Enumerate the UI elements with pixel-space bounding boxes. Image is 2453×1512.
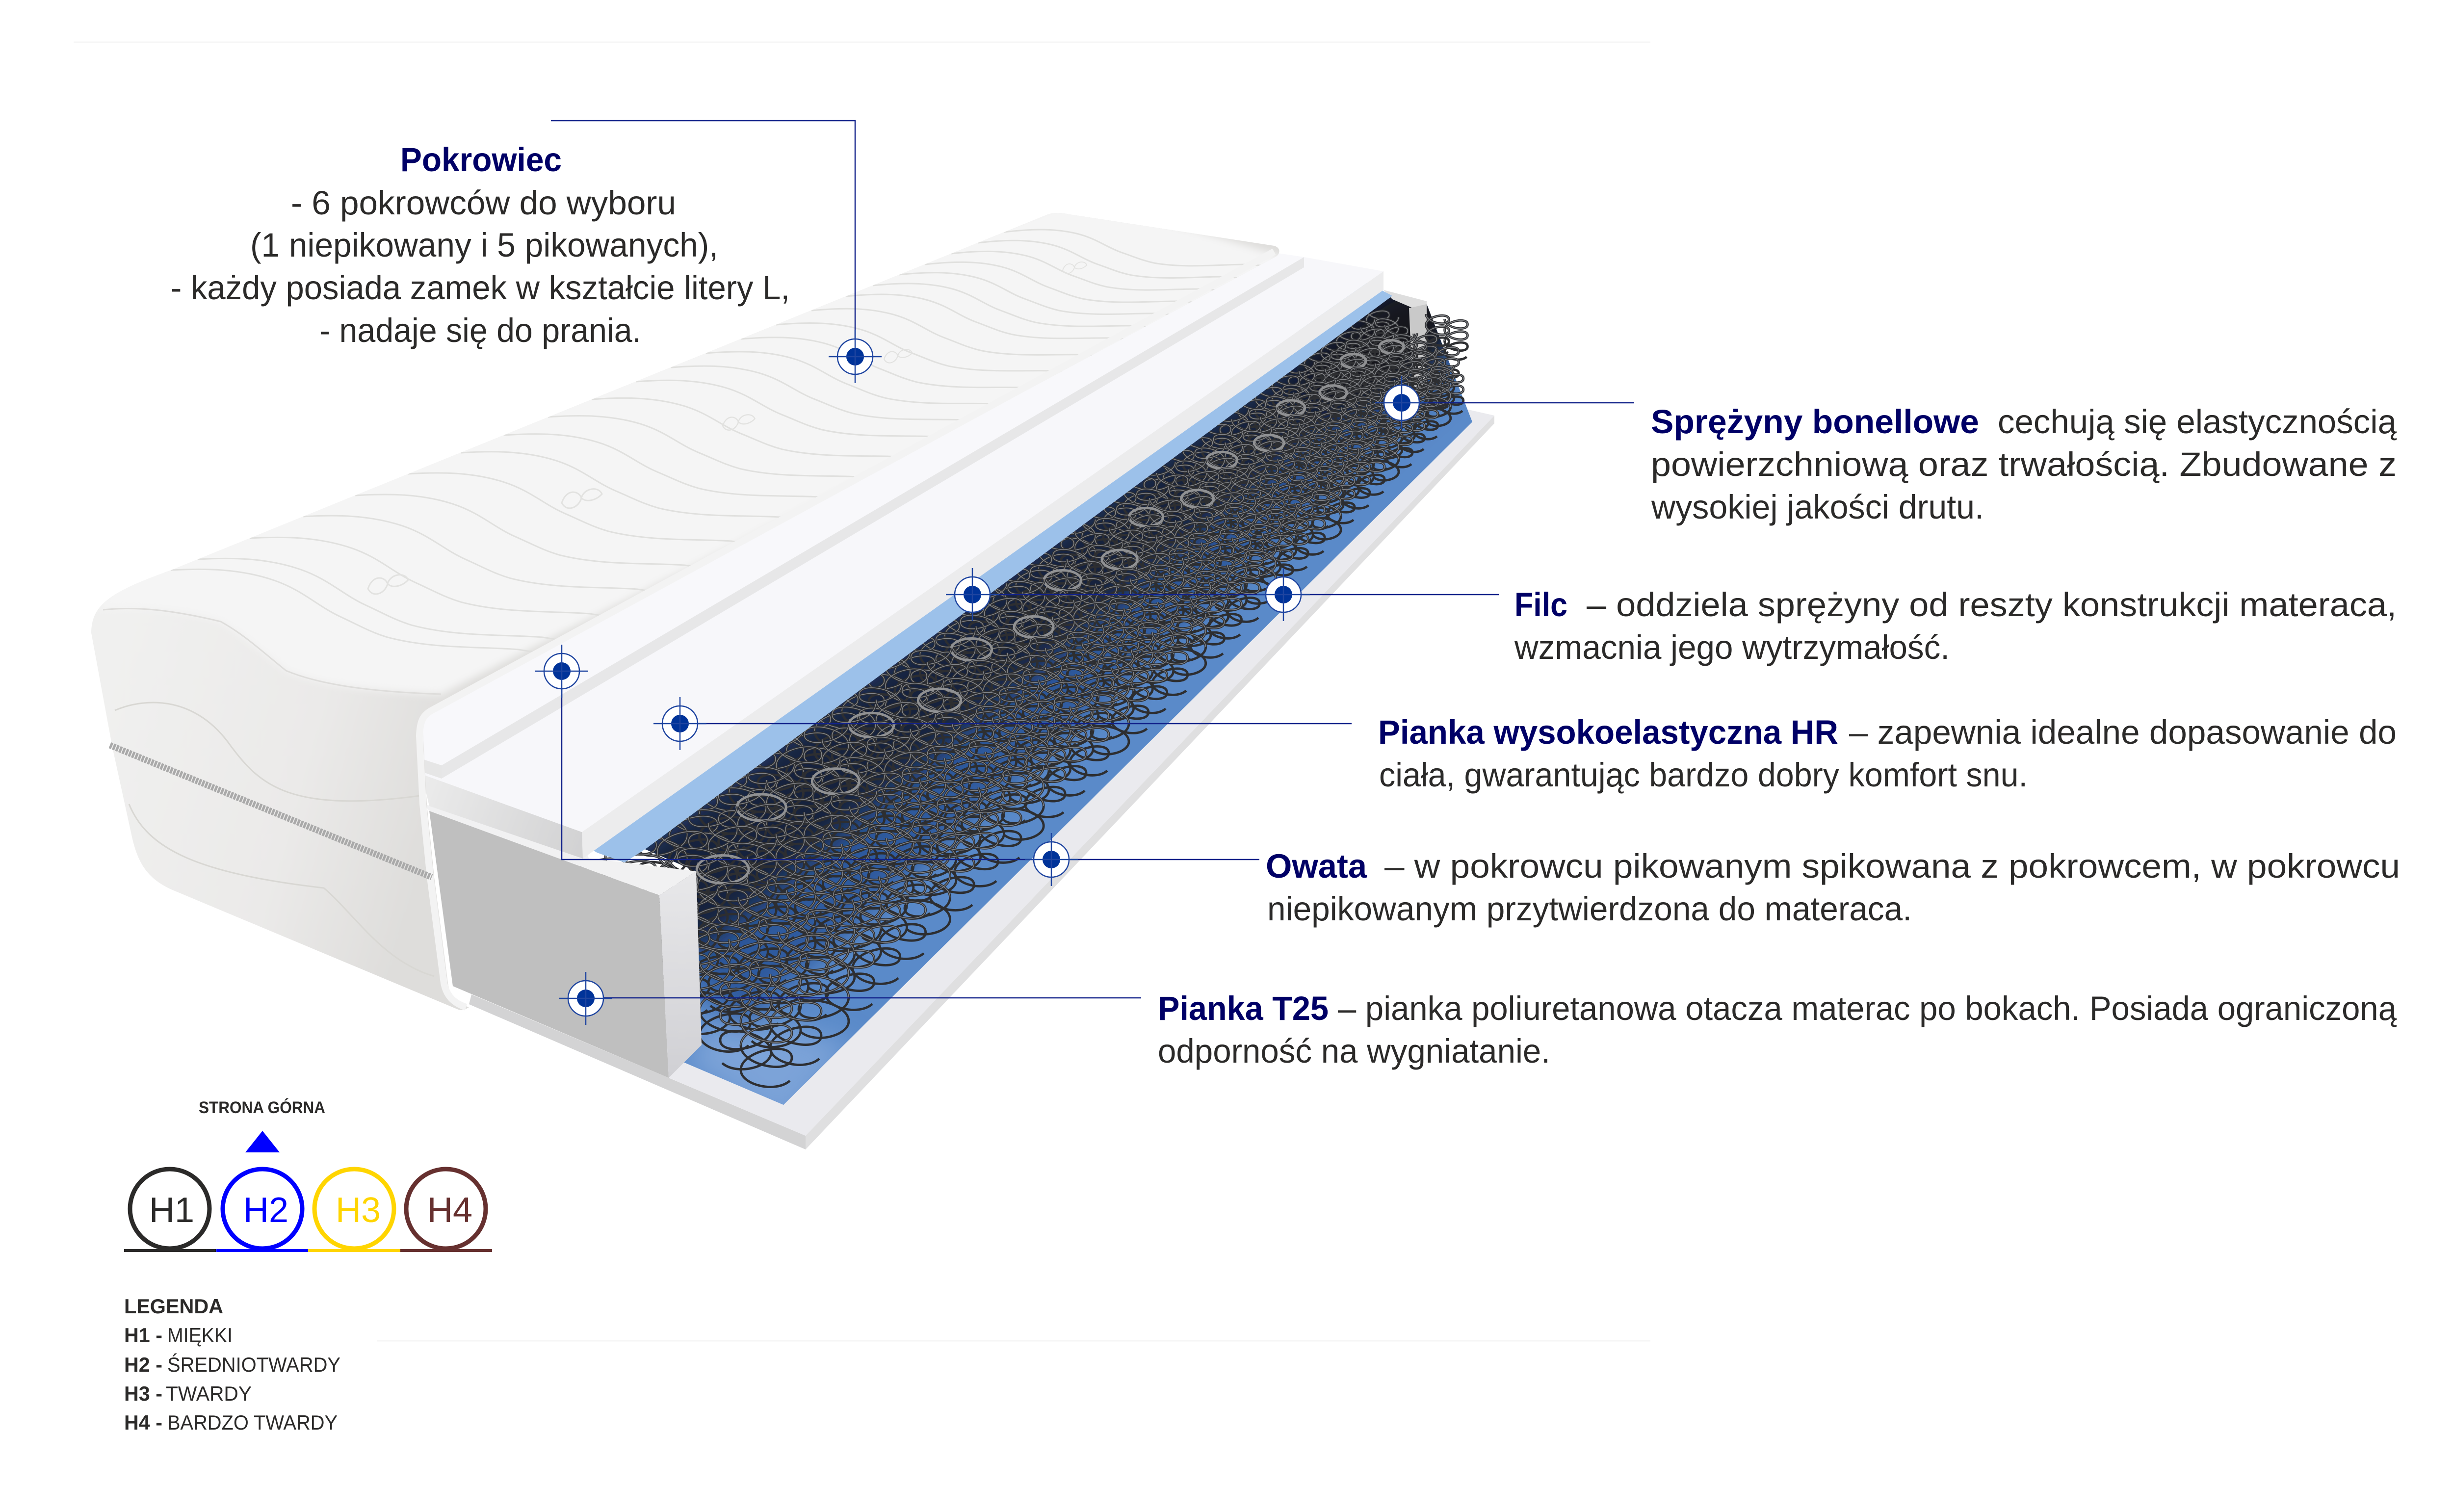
text block: Sprężyny bonellowe: powierzchniową oraz trwałością. Zbudowane z <box>1651 445 2397 483</box>
leader lines <box>551 121 1634 998</box>
text block: Pianka wysokoelastyczna HR <box>1378 713 2397 794</box>
arrow: top side marker <box>245 1131 280 1152</box>
legend: LEGENDA <box>124 1295 223 1318</box>
label: top side: STRONA GÓRNA <box>199 1098 325 1117</box>
thin wadding layer <box>422 252 1304 779</box>
target: felt lower <box>1257 568 1310 621</box>
target: springs <box>1375 376 1428 429</box>
legend: H1 - <box>124 1324 162 1347</box>
text block: Filc: – oddziela sprężyny od reszty konstrukcji materaca, <box>1587 586 2397 624</box>
legend: H4 - <box>124 1411 162 1434</box>
cover hem edge <box>419 252 1274 1007</box>
zipper <box>110 745 432 877</box>
text block: Sprężyny bonellowe: cechują się elastycznością <box>1998 403 2397 441</box>
text block: Owata: Owata <box>1266 847 1367 885</box>
text block: Owata: niepikowanym przytwierdzona do materaca. <box>1267 890 1912 928</box>
text block: Sprężyny bonellowe: Sprężyny bonellowe <box>1651 403 1979 441</box>
text block: Pokrowiec: - nadaje się do prania. <box>319 312 641 349</box>
badge: H3: H3 <box>336 1191 381 1230</box>
badge: H3 <box>308 1169 400 1252</box>
text block: Filc: Filc <box>1514 586 1567 624</box>
blue felt strip <box>584 282 1392 862</box>
target: felt upper <box>946 568 999 621</box>
badge: H4: H4 <box>427 1191 472 1230</box>
target: wadding edge <box>1025 833 1078 886</box>
legend: MIĘKKI <box>167 1324 233 1347</box>
mattress illustration <box>91 196 1521 1149</box>
text block: Pianka wysokoelastyczna HR: ciała, gwarantując bardzo dobry komfort snu. <box>1379 756 2028 794</box>
legend: H2 - <box>124 1353 162 1376</box>
text block: Pianka T25 <box>1158 990 2397 1070</box>
target: HR foam <box>653 697 706 750</box>
text block: Owata: – w pokrowcu pikowanym spikowana z pokrowcem, w pokrowcu <box>1384 847 2400 885</box>
legend: ŚREDNIOTWARDY <box>167 1353 340 1376</box>
legend: BARDZO TWARDY <box>167 1411 338 1434</box>
high-elastic foam layer <box>422 257 1383 859</box>
text block: Pokrowiec: - każdy posiada zamek w kształcie litery L, <box>171 269 790 307</box>
text block: Pianka T25: – pianka poliuretanowa otacza materac po bokach. Posiada ograniczoną <box>1338 990 2397 1027</box>
spring cavity with blue felt floor <box>645 297 1472 1105</box>
text block: Owata <box>1266 847 2400 928</box>
badge: H1: H1 <box>149 1191 194 1230</box>
text block: Sprężyny bonellowe: wysokiej jakości drutu. <box>1651 488 1984 526</box>
text block: Pianka T25: Pianka T25 <box>1158 990 1329 1027</box>
legend: H3 - <box>124 1382 162 1405</box>
badge: H2: H2 <box>243 1191 288 1230</box>
badge: H4 <box>400 1169 492 1252</box>
legend <box>124 1295 340 1434</box>
text block: Pokrowiec: Pokrowiec <box>400 141 562 179</box>
base foam layer <box>453 406 1494 1149</box>
text block: Pokrowiec: (1 niepikowany i 5 pikowanych), <box>250 226 718 264</box>
text block: Filc: wzmacnia jego wytrzymałość. <box>1514 628 1950 666</box>
legend: TWARDY <box>166 1382 252 1405</box>
badge: H1 <box>124 1169 216 1252</box>
text block: Pokrowiec <box>171 141 790 349</box>
badge: H2 <box>216 1169 308 1252</box>
bonnell springs <box>576 310 1467 1087</box>
text block: Pianka T25: odporność na wygniatanie. <box>1158 1032 1550 1070</box>
target: cover <box>829 330 882 383</box>
text block: Pianka wysokoelastyczna HR: – zapewnia idealne dopasowanie do <box>1849 713 2397 751</box>
text block: Pianka wysokoelastyczna HR: Pianka wysokoelastyczna HR <box>1378 713 1838 751</box>
text block: Sprężyny bonellowe <box>1651 403 2397 526</box>
text block: Filc <box>1514 586 2397 666</box>
quilted cover <box>91 196 1295 1010</box>
far end panel <box>1383 290 1427 397</box>
text block: Pokrowiec: - 6 pokrowców do wyboru <box>291 184 676 222</box>
target: T25 foam <box>559 972 612 1025</box>
T25 foam block <box>424 805 702 1078</box>
firmness scale <box>124 1098 492 1252</box>
target: wadding <box>535 645 588 698</box>
